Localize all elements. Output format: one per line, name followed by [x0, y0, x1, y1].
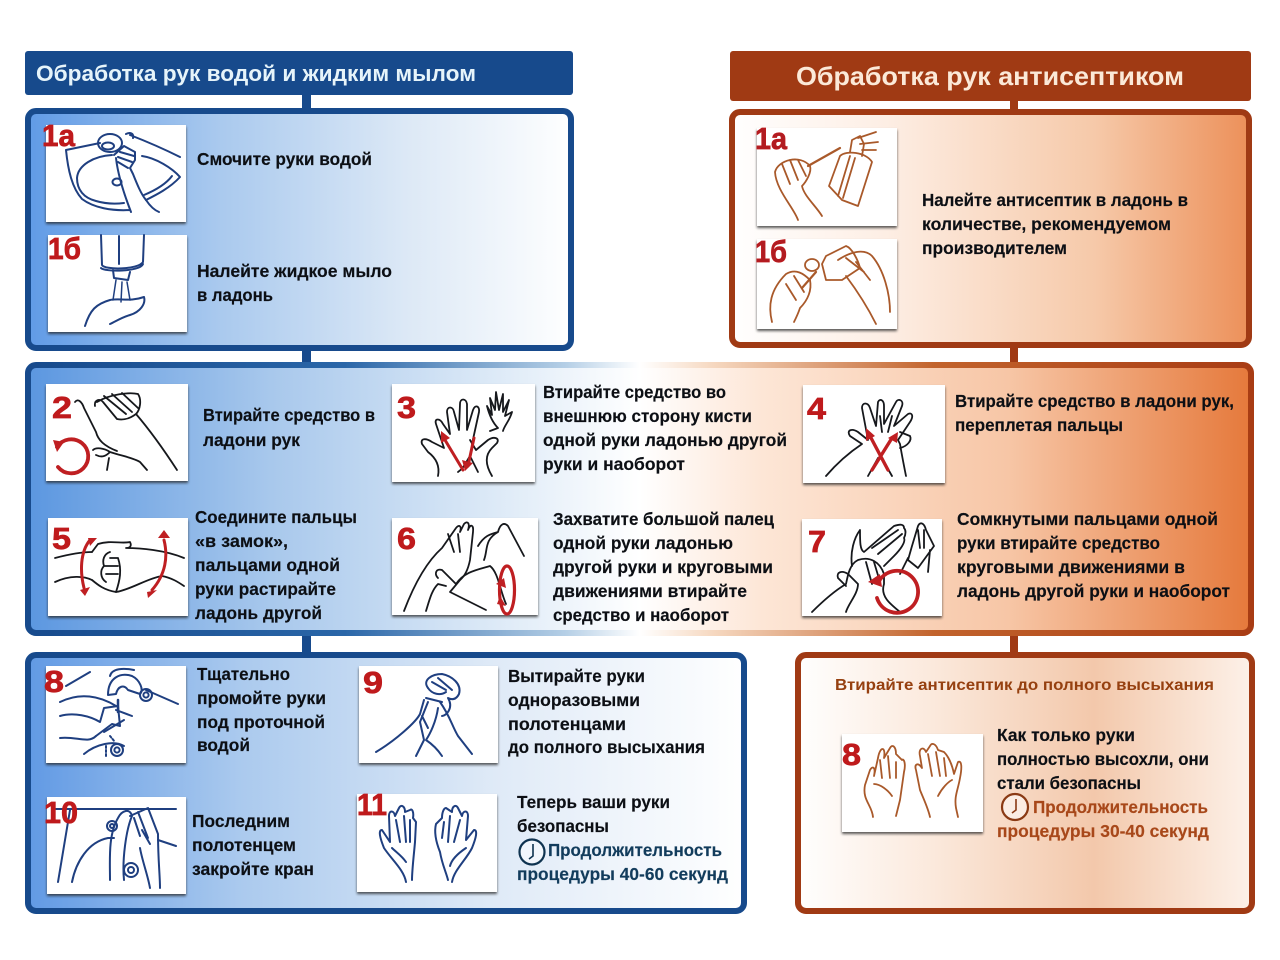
step 10 soap: закройте кран	[192, 859, 314, 879]
antiseptic text 1: производителем	[922, 238, 1067, 258]
step 9 soap: одноразовыми	[508, 690, 640, 710]
step 1b soap: в ладонь	[197, 285, 273, 305]
step 7	[802, 509, 1230, 616]
step 4: переплетая пальцы	[955, 415, 1123, 435]
antiseptic step 8 text	[997, 725, 1209, 841]
step 7: 7	[808, 524, 826, 559]
header: soap and water	[25, 51, 573, 95]
header: antiseptic	[730, 51, 1251, 101]
step 5: 5	[52, 521, 71, 556]
step 3: 3	[397, 390, 416, 425]
step 4	[803, 385, 1234, 483]
antiseptic step 8 text: Продолжительность	[1033, 797, 1208, 817]
step 2: ладони рук	[203, 430, 300, 450]
step 10 soap	[44, 795, 314, 894]
step 6: 6	[397, 521, 416, 556]
step 5: ладонь другой	[195, 603, 322, 623]
step 9 soap: 9	[363, 665, 383, 700]
antiseptic image 1b	[755, 234, 897, 329]
panel: soap steps 1a and 1b	[28, 111, 571, 348]
antiseptic text 1: Налейте антисептик в ладонь в	[922, 190, 1188, 210]
step 6: другой руки и круговыми	[553, 557, 773, 577]
icon: clock antiseptic	[1002, 794, 1028, 820]
icon: clock	[520, 840, 544, 864]
step 8 soap: промойте руки	[197, 688, 326, 708]
panel: shared rubbing steps 2 to 7	[28, 365, 1251, 633]
step 10 soap: 10	[44, 795, 78, 830]
step 11 soap: Теперь ваши руки	[517, 792, 670, 812]
antiseptic step 8 image	[842, 734, 983, 832]
antiseptic step 8 text: стали безопасны	[997, 773, 1141, 793]
antiseptic step 8 text: Как только руки	[997, 725, 1135, 745]
antiseptic text 1	[922, 190, 1188, 258]
step 8 soap: водой	[197, 735, 250, 755]
step 7: ладонь другой руки и наоборот	[957, 581, 1230, 601]
step 9 soap: полотенцами	[508, 714, 626, 734]
step 10 soap: полотенцем	[192, 835, 296, 855]
step 8 soap: под проточной	[197, 712, 325, 732]
antiseptic image 1b: 1б	[755, 234, 787, 269]
step 8 soap	[44, 664, 326, 763]
step 2: 2	[52, 390, 72, 425]
step 6	[392, 509, 774, 625]
panel: antiseptic steps 1a and 1b	[732, 112, 1249, 345]
panel: antiseptic final step	[798, 655, 1252, 911]
step 11 soap	[357, 787, 728, 892]
step 6: Захватите большой палец	[553, 509, 774, 529]
step 1b soap: Налейте жидкое мыло	[197, 261, 392, 281]
step 3	[392, 382, 787, 482]
step 1a soap	[42, 118, 372, 222]
step 11 soap: 11	[357, 787, 387, 822]
step 5: руки растирайте	[195, 579, 336, 599]
step 9 soap: Вытирайте руки	[508, 666, 645, 686]
step 7: руки втирайте средство	[957, 533, 1160, 553]
step 3: внешнюю сторону кисти	[543, 406, 752, 426]
antiseptic image 1a	[755, 121, 897, 226]
step 5	[48, 507, 357, 623]
step 9 soap	[359, 665, 705, 763]
step 2	[46, 384, 375, 481]
connector lines between panels	[302, 94, 1018, 654]
step 5: пальцами одной	[195, 555, 340, 575]
step 11 soap: безопасны	[517, 816, 609, 836]
step 5: Соедините пальцы	[195, 507, 357, 527]
panel: soap finishing steps 8 to 11	[28, 655, 744, 911]
antiseptic step 8 image: 8	[842, 737, 861, 772]
step 7: круговыми движениями в	[957, 557, 1185, 577]
antiseptic image 1a: 1а	[755, 121, 788, 156]
step 4: 4	[807, 391, 827, 426]
step 9 soap: до полного высыхания	[508, 737, 705, 757]
step 7: Сомкнутыми пальцами одной	[957, 509, 1218, 529]
header: antiseptic: Обработка рук антисептиком	[796, 61, 1184, 91]
step 3: Втирайте средство во	[543, 382, 726, 402]
antiseptic step 8 text: полностью высохли, они	[997, 749, 1209, 769]
step 6: одной руки ладонью	[553, 533, 733, 553]
step 11 soap: процедуры 40-60 секунд	[517, 864, 728, 884]
step 2: Втирайте средство в	[203, 405, 375, 425]
step 10 soap: Последним	[192, 811, 290, 831]
step 3: одной руки ладонью другой	[543, 430, 787, 450]
step 6: средство и наоборот	[553, 605, 729, 625]
step 6: движениями втирайте	[553, 581, 747, 601]
step 1b soap	[48, 231, 392, 332]
antiseptic panel heading: Втирайте антисептик до полного высыхания	[835, 677, 1214, 694]
step 5: «в замок»,	[195, 531, 288, 551]
step 3: руки и наоборот	[543, 454, 685, 474]
antiseptic step 8 text: процедуры 30-40 секунд	[997, 821, 1209, 841]
step 8 soap: Тщательно	[197, 664, 290, 684]
step 1a soap: Смочите руки водой	[197, 149, 372, 169]
step 1a soap: 1а	[42, 118, 76, 153]
step 1b soap: 1б	[48, 231, 81, 266]
step 8 soap: 8	[44, 664, 64, 699]
step 4: Втирайте средство в ладони рук,	[955, 391, 1234, 411]
step 11 soap: Продолжительность	[548, 840, 722, 860]
header: soap and water: Обработка рук водой и жидким мылом	[36, 61, 476, 86]
antiseptic text 1: количестве, рекомендуемом	[922, 214, 1171, 234]
